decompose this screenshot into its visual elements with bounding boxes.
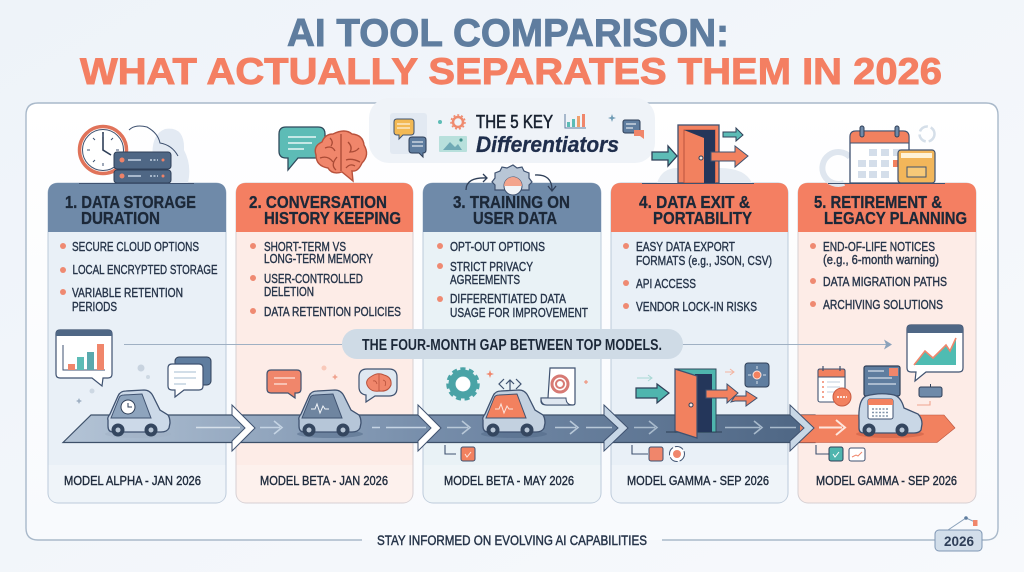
icon: status markers four xyxy=(632,445,684,462)
icon: chart window xyxy=(56,330,112,386)
icon: stacked messages xyxy=(76,357,211,404)
icon: gear and picture xyxy=(438,115,467,152)
heading: 2. CONVERSATION xyxy=(249,192,387,212)
icon: status markers five xyxy=(816,445,865,461)
panel: conversation history keeping xyxy=(236,183,413,503)
heading: LEGACY PLANNING xyxy=(824,208,967,228)
icon: orange message xyxy=(267,366,338,398)
bullet list: SHORT-TERM VS xyxy=(264,239,346,254)
icon: mini chart xyxy=(565,114,586,128)
icon: checklist marker three xyxy=(445,445,475,461)
heading: 3. TRAINING ON xyxy=(453,192,570,212)
heading xyxy=(639,192,752,228)
title xyxy=(80,12,942,92)
road chevrons xyxy=(232,405,814,451)
icon: speech bubble and brain xyxy=(279,127,367,181)
heading: 5. RETIREMENT & xyxy=(814,192,942,212)
gap connector line xyxy=(124,340,892,350)
icon: growth chart window xyxy=(907,325,963,381)
model label: MODEL GAMMA - SEP 2026 xyxy=(816,473,957,488)
model label: MODEL BETA - JAN 2026 xyxy=(260,473,388,488)
panel: data exit and portability xyxy=(611,183,788,503)
bullet list: SECURE CLOUD OPTIONS xyxy=(72,239,199,254)
title: WHAT ACTUALLY SEPARATES THEM IN 2026 xyxy=(80,51,942,92)
heading xyxy=(814,192,967,228)
road markings xyxy=(196,420,845,435)
bullet list xyxy=(623,239,772,314)
bullet list: DATA MIGRATION PATHS xyxy=(823,274,947,289)
timeline road xyxy=(63,405,955,451)
bullet list: LONG-TERM MEMORY xyxy=(264,251,373,266)
icon: car with orange window xyxy=(481,390,547,438)
bullet list xyxy=(60,239,218,314)
bullet list: DATA RETENTION POLICIES xyxy=(264,304,401,319)
panel: data storage duration xyxy=(48,183,226,503)
panel: retirement and legacy planning xyxy=(798,183,976,503)
year badge: 2026 xyxy=(944,534,974,549)
icon: teal gear xyxy=(448,369,494,399)
bullet list: VENDOR LOCK-IN RISKS xyxy=(636,299,757,314)
bullet list: USER-CONTROLLED xyxy=(264,271,363,286)
icon: calendar list xyxy=(818,366,851,406)
icon: brain bubble xyxy=(359,369,397,402)
icon: gear with arrows xyxy=(466,165,556,195)
model label: MODEL BETA - MAY 2026 xyxy=(444,473,574,488)
icon: message cards xyxy=(608,114,644,139)
bullet list: DIFFERENTIATED DATA xyxy=(450,291,566,306)
icon: car with clock xyxy=(105,390,171,438)
callout: four-month gap xyxy=(342,329,683,359)
model label: MODEL GAMMA - SEP 2026 xyxy=(627,473,769,488)
heading: HISTORY KEEPING xyxy=(264,208,401,228)
panel: training on user data xyxy=(423,183,601,503)
icon: calendar and folder xyxy=(822,126,945,184)
bullet list: LOCAL ENCRYPTED STORAGE xyxy=(72,262,218,277)
icon: chat bubbles xyxy=(390,113,427,157)
outer frame xyxy=(26,103,998,540)
icon: small connector box xyxy=(917,384,942,405)
bullet list: STRICT PRIVACY xyxy=(450,259,533,274)
text: the 5 key: THE 5 KEY xyxy=(476,112,553,132)
bullet list: PERIODS xyxy=(72,299,117,314)
bullet list xyxy=(437,239,588,320)
heading: 4. DATA EXIT & xyxy=(639,192,750,212)
text: differentiators: Differentiators xyxy=(476,132,619,157)
icon: car with monitor xyxy=(856,366,924,438)
title: AI TOOL COMPARISON: xyxy=(287,12,729,55)
icon: gear box xyxy=(745,363,769,387)
icon: car with pulse xyxy=(297,390,363,438)
bullet list: ARCHIVING SOLUTIONS xyxy=(823,297,943,312)
bullet list: AGREEMENTS xyxy=(450,272,520,287)
year badge xyxy=(935,516,982,551)
bullet list: DELETION xyxy=(264,284,314,299)
icon: door with arrows xyxy=(642,125,754,184)
bullet list: FORMATS (e.g., JSON, CSV) xyxy=(636,253,772,268)
heading: PORTABILITY xyxy=(653,208,752,228)
bullet list: END-OF-LIFE NOTICES xyxy=(823,239,935,254)
icon: clock and servers xyxy=(79,126,194,184)
bullet list: API ACCESS xyxy=(636,276,696,291)
heading: USER DATA xyxy=(473,208,557,228)
heading xyxy=(65,192,196,228)
bullet list: USAGE FOR IMPROVEMENT xyxy=(450,305,588,320)
bullet list xyxy=(250,239,401,319)
callout: four-month gap: THE FOUR-MONTH GAP BETWEEN TOP MODELS. xyxy=(362,337,662,354)
icon: open door with arrows xyxy=(636,369,757,438)
heading: 1. DATA STORAGE xyxy=(65,192,196,212)
callout: the 5 key differentiators xyxy=(369,98,655,163)
bullet list xyxy=(810,239,947,312)
footer text: STAY INFORMED ON EVOLVING AI CAPABILITIES xyxy=(377,533,647,548)
heading xyxy=(249,192,401,228)
bullet list: EASY DATA EXPORT xyxy=(636,239,735,254)
bullet list: VARIABLE RETENTION xyxy=(72,285,183,300)
icon: document with logo xyxy=(541,368,588,405)
icon: code arrows xyxy=(499,379,521,390)
bullet list: (e.g., 6-month warning) xyxy=(823,252,939,267)
heading: DURATION xyxy=(81,208,160,228)
bullet list: OPT-OUT OPTIONS xyxy=(450,239,545,254)
heading xyxy=(453,192,570,228)
model label: MODEL ALPHA - JAN 2026 xyxy=(64,473,201,488)
